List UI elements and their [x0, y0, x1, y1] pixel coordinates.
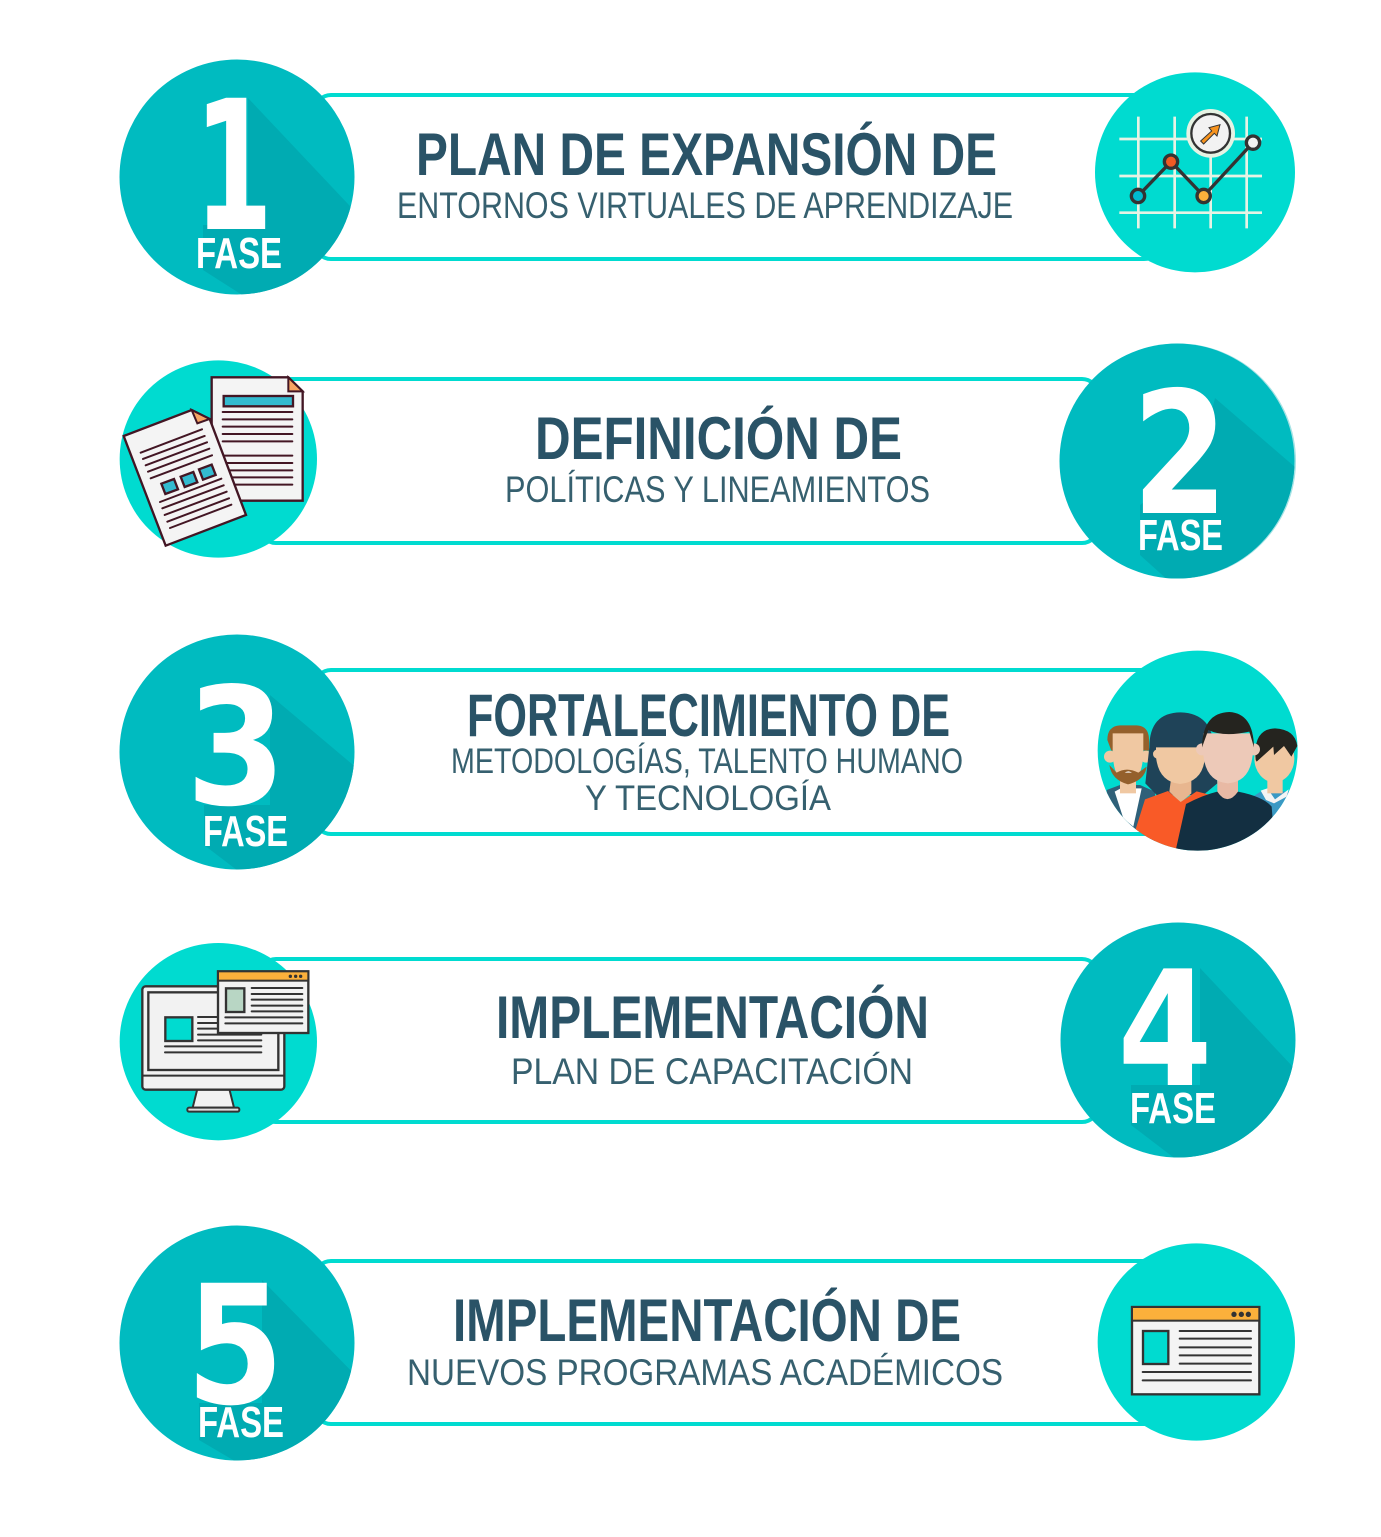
card outline 1	[315, 95, 1160, 259]
panel: fase 4	[120, 922, 1310, 1170]
icon: documents	[120, 360, 317, 558]
panel: fase 3	[120, 634, 1298, 880]
number badge 2: FASE	[1138, 511, 1223, 560]
heading: plan de expansion: PLAN DE EXPANSIÓN DE	[416, 121, 997, 188]
card outline 4	[260, 959, 1098, 1122]
number badge 2: 2	[1132, 356, 1228, 554]
card outline 3	[315, 670, 1160, 834]
heading: implementacion de: IMPLEMENTACIÓN DE	[453, 1287, 961, 1354]
number badge 4	[1060, 922, 1296, 1158]
panel: fase 5	[120, 1226, 1295, 1470]
number badge 1: 1	[194, 63, 273, 272]
subheading: plan de capacitacion: PLAN DE CAPACITACIÓN	[511, 1051, 913, 1092]
subheading: entornos virtuales: ENTORNOS VIRTUALES DE APRENDIZAJE	[397, 185, 1013, 226]
icon: team of people	[1098, 651, 1298, 853]
card outline 2	[260, 379, 1098, 543]
icon: computer monitor with window	[120, 943, 317, 1140]
number badge 4: 4	[1118, 936, 1212, 1123]
number badge 1: FASE	[196, 229, 282, 278]
subheading: metodologias: METODOLOGÍAS, TALENTO HUMANO	[451, 742, 963, 781]
subheading: tecnologia: Y TECNOLOGÍA	[585, 779, 832, 818]
subheading: nuevos programas: NUEVOS PROGRAMAS ACADÉMICOS	[407, 1352, 1003, 1393]
card outline 5	[315, 1261, 1160, 1424]
number badge 3: 3	[186, 654, 286, 843]
number badge 5: 5	[186, 1250, 284, 1442]
number badge 4: FASE	[1130, 1084, 1216, 1133]
icon: browser window	[1098, 1243, 1295, 1441]
number badge 2	[1060, 344, 1296, 578]
icon: line chart	[1095, 72, 1295, 272]
number badge 5	[120, 1226, 365, 1470]
number badge 5: FASE	[198, 1398, 284, 1447]
panel: fase 2	[120, 344, 1310, 600]
panel: fase 1	[120, 60, 1295, 310]
number badge 3: FASE	[203, 807, 288, 856]
heading: definicion: DEFINICIÓN DE	[535, 405, 902, 472]
number badge 1	[120, 60, 354, 294]
heading: implementacion: IMPLEMENTACIÓN	[496, 984, 929, 1051]
subheading: politicas: POLÍTICAS Y LINEAMIENTOS	[505, 469, 930, 510]
number badge 3	[120, 634, 365, 880]
heading: fortalecimiento: FORTALECIMIENTO DE	[467, 682, 950, 749]
